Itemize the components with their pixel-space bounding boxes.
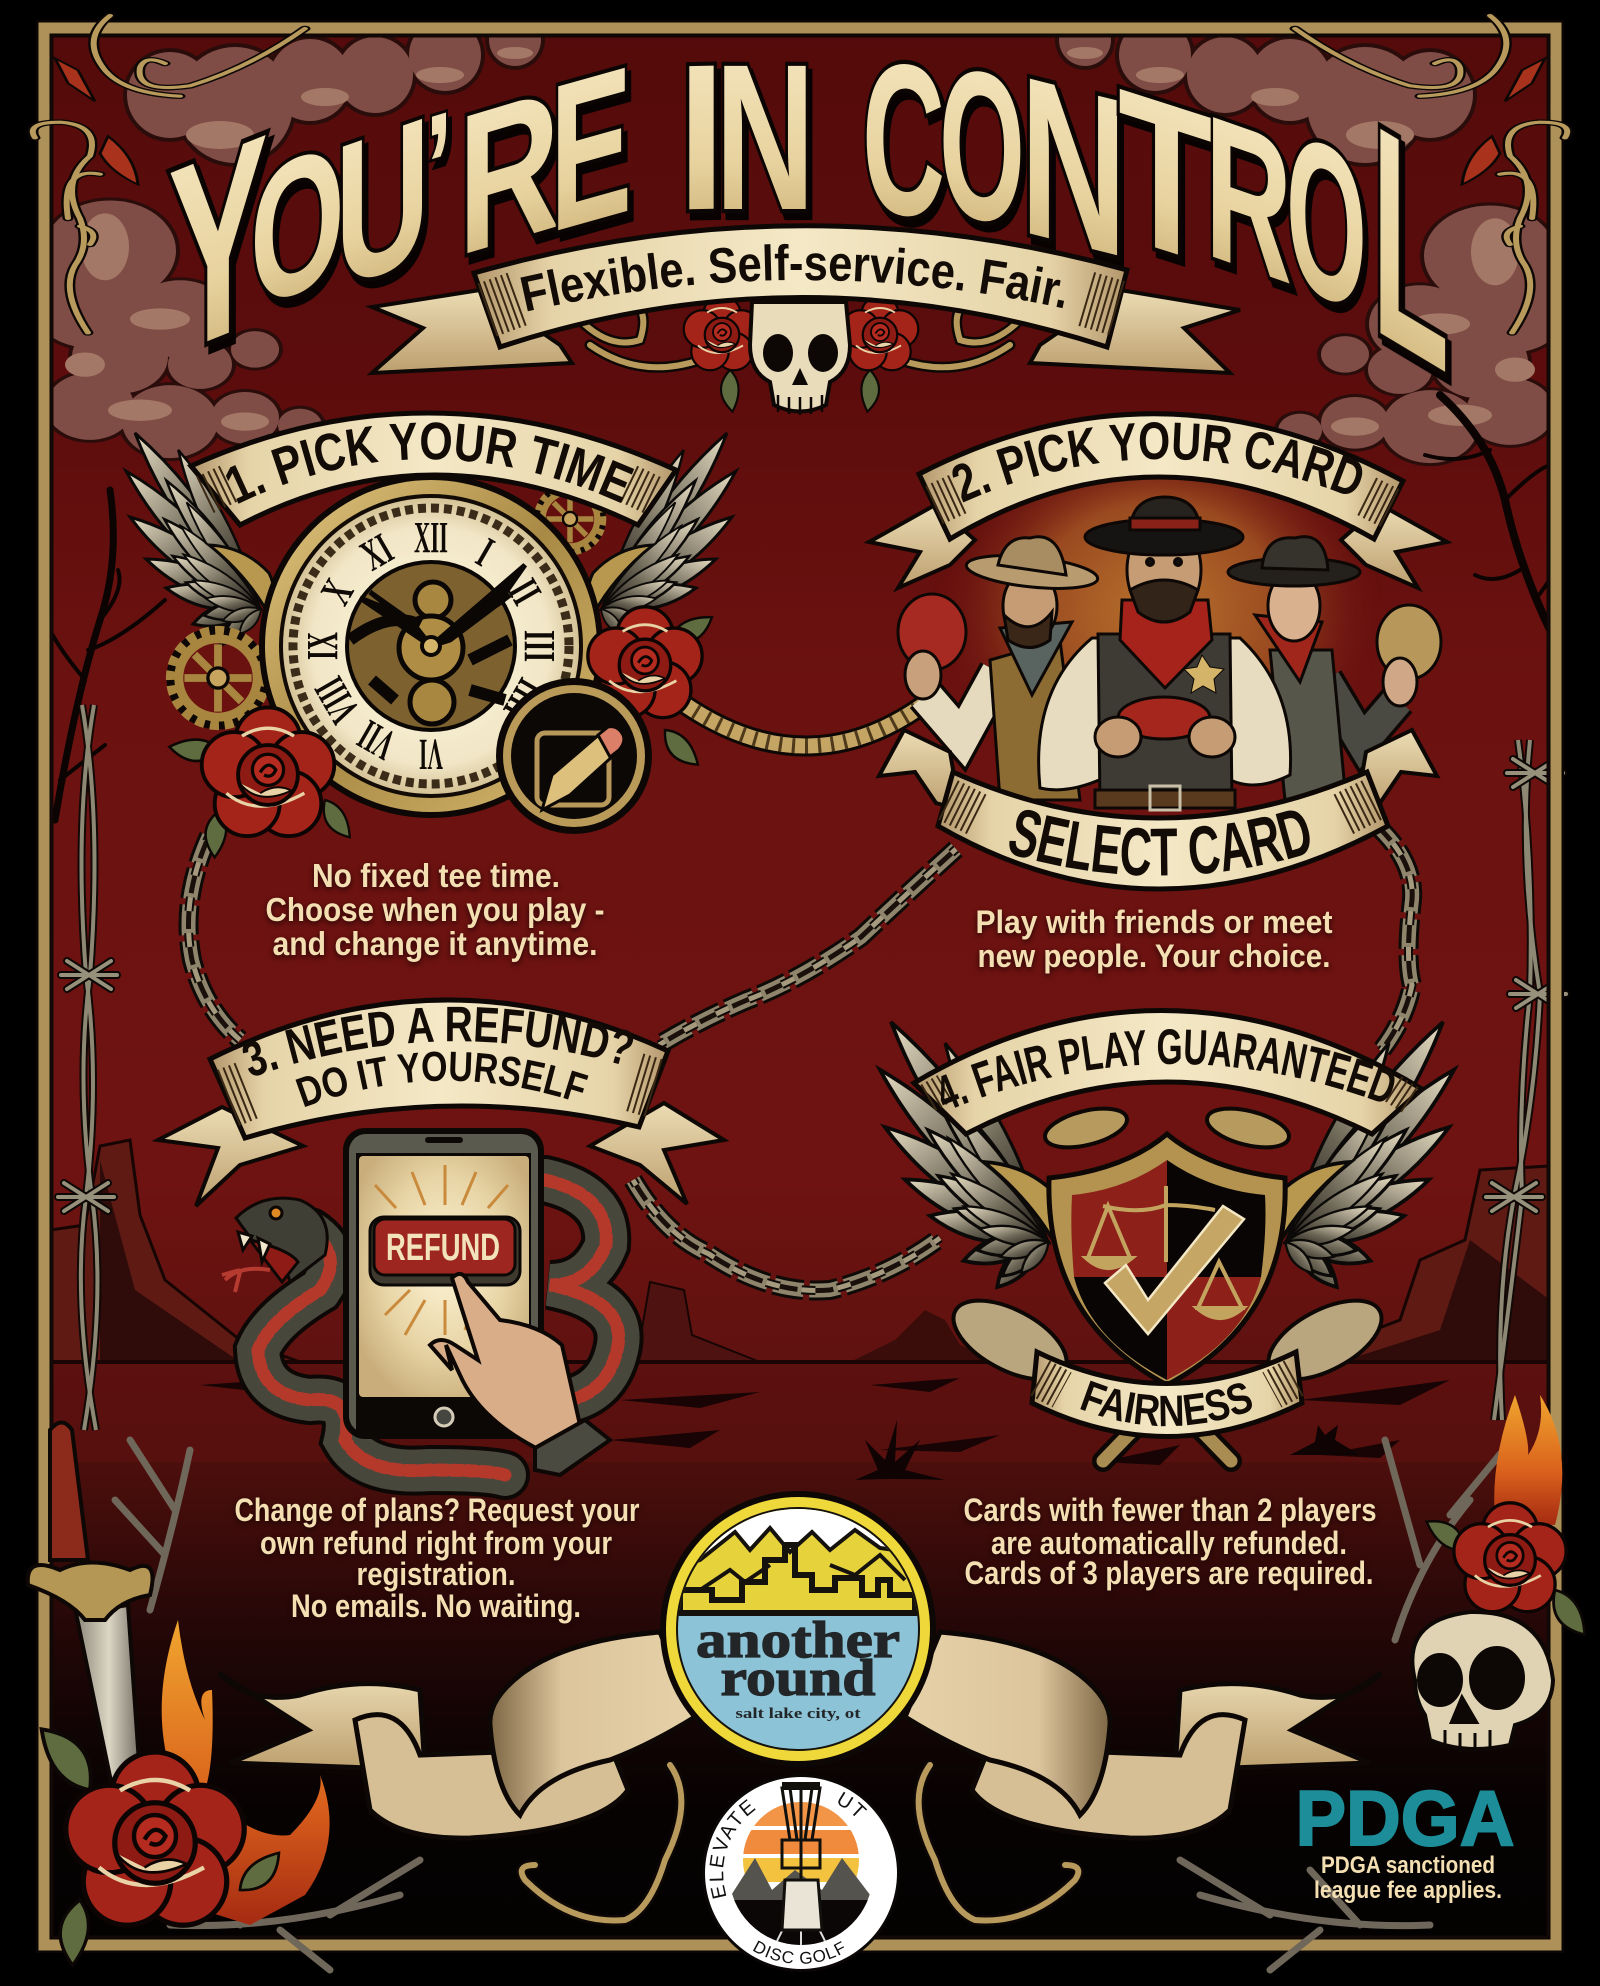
title: I bbox=[678, 21, 725, 254]
banner: 2. pick your card bbox=[864, 411, 1452, 592]
step 4 text: are automatically refunded. bbox=[991, 1525, 1347, 1561]
step 1: clock illustration bbox=[122, 410, 740, 860]
step 4: fairness illustration bbox=[875, 1008, 1459, 1472]
step 1 text: No fixed tee time. bbox=[312, 857, 560, 894]
title: C bbox=[862, 18, 945, 262]
icon: rose right bbox=[588, 607, 717, 774]
icon: pointing hand bbox=[430, 1274, 610, 1475]
icon: pocket watch: IIII bbox=[494, 671, 556, 730]
icon: wings fairness bbox=[880, 1022, 1454, 1287]
pdga logo and note: PDGA bbox=[1296, 1774, 1514, 1862]
title bbox=[168, 18, 1449, 438]
banner: select card: SELECT CARD bbox=[1009, 810, 1310, 876]
flames right bbox=[1494, 1395, 1562, 1525]
icon: check mark bbox=[1105, 1206, 1244, 1334]
banner: 3. need a refund: DO IT YOURSELF bbox=[296, 1052, 588, 1107]
banner: 3. need a refund bbox=[152, 997, 730, 1246]
title: L bbox=[1372, 59, 1449, 438]
title: N bbox=[1020, 27, 1127, 306]
blank ribbon left bbox=[219, 1632, 695, 1838]
icon: scales bbox=[1086, 1186, 1243, 1318]
step 2 text: Play with friends or meet bbox=[976, 904, 1333, 940]
skull right bbox=[1412, 1612, 1553, 1752]
step 2 text bbox=[976, 904, 1333, 974]
cowboy right bbox=[1228, 537, 1441, 800]
step 1 text: Choose when you play - bbox=[266, 891, 604, 928]
refund button: REFUND bbox=[386, 1227, 500, 1269]
icon: crossed sticks bbox=[1103, 1428, 1231, 1461]
dead trees bbox=[50, 395, 1558, 820]
step 2: cowboys illustration bbox=[864, 411, 1452, 892]
step 3 text: Change of plans? Request your bbox=[234, 1492, 640, 1528]
step 3 text: own refund right from your bbox=[260, 1525, 612, 1561]
storm clouds bbox=[28, 10, 1572, 466]
title: U bbox=[335, 72, 430, 332]
title: R bbox=[1205, 71, 1292, 327]
subtitle banner bbox=[364, 223, 1241, 376]
step 4 text bbox=[964, 1492, 1376, 1591]
banner: select card bbox=[876, 728, 1440, 892]
icon: floating discs bbox=[1041, 1101, 1293, 1155]
desert landscape bbox=[42, 1140, 1558, 1480]
dagger bbox=[28, 1422, 152, 1815]
rose right bbox=[1424, 1503, 1588, 1642]
title: ’ bbox=[425, 79, 453, 255]
banner: 4. fair play guaranteed: 4. FAIR PLAY GUARANTEED bbox=[940, 1029, 1395, 1108]
icon: pocket watch: IX bbox=[298, 632, 347, 660]
icon: pocket watch: XI bbox=[352, 524, 401, 580]
icon: pocket watch: VI bbox=[419, 730, 443, 779]
logo: another round: round bbox=[720, 1650, 876, 1707]
pdga logo and note bbox=[1296, 1774, 1514, 1904]
banner: 2. pick your card: 2. PICK YOUR CARD bbox=[952, 422, 1362, 502]
barbed wire bbox=[58, 705, 1566, 1430]
title: Y bbox=[168, 76, 268, 414]
icon: pocket watch: II bbox=[499, 571, 551, 613]
icon: pocket watch: XII bbox=[414, 513, 448, 562]
step 1 text bbox=[266, 857, 604, 962]
logo: elevate ut disc golf: UT bbox=[838, 1792, 868, 1816]
icon: rose left bbox=[169, 707, 352, 858]
rose large bbox=[37, 1717, 289, 1967]
banner: fairness bbox=[1029, 1348, 1305, 1439]
title: T bbox=[1118, 41, 1215, 312]
icon: pocket watch: VIII bbox=[305, 669, 369, 732]
icon: pocket watch: VII bbox=[350, 710, 404, 770]
icon: edit badge bbox=[496, 678, 652, 834]
icon: shield bbox=[1049, 1134, 1285, 1385]
flames left bbox=[155, 1620, 330, 1925]
title: R bbox=[458, 47, 560, 299]
step 3 text: registration. bbox=[356, 1556, 516, 1592]
blank ribbon right bbox=[905, 1632, 1381, 1838]
icon: side discs bbox=[941, 1284, 1394, 1396]
logo: elevate ut disc golf: DISC GOLF bbox=[753, 1940, 844, 1964]
title: O bbox=[1286, 81, 1367, 362]
icon: pocket watch: III bbox=[515, 630, 564, 662]
cowboy center bbox=[1039, 497, 1291, 810]
step 4 text: Cards with fewer than 2 players bbox=[964, 1492, 1376, 1528]
subtitle banner: Flexible. Self-service. Fair. bbox=[520, 244, 1064, 312]
icon: phone bbox=[343, 1128, 544, 1439]
refund button bbox=[370, 1217, 520, 1285]
chains bbox=[188, 823, 1412, 1291]
title: O bbox=[250, 99, 345, 352]
step 1 text: and change it anytime. bbox=[272, 925, 598, 962]
banner: 3. need a refund: 3. NEED A REFUND? bbox=[242, 1006, 634, 1076]
pdga logo and note: league fee applies. bbox=[1314, 1877, 1502, 1904]
icon: pocket watch: I bbox=[469, 528, 502, 576]
logo: elevate ut disc golf: ELEVATE bbox=[710, 1799, 756, 1899]
step 2 text: new people. Your choice. bbox=[978, 938, 1330, 974]
logo: another round: salt lake city, ot bbox=[736, 1706, 861, 1722]
dagger and rose bbox=[28, 1422, 330, 1967]
logo: another round: another bbox=[696, 1612, 900, 1669]
icon: wings bbox=[126, 433, 736, 645]
icon: pocket watch: X bbox=[311, 571, 363, 613]
logo: elevate ut disc golf bbox=[705, 1777, 897, 1972]
step 3 text bbox=[234, 1492, 640, 1624]
thorn branches bbox=[115, 1430, 1520, 1970]
skull and roses ornament bbox=[580, 296, 1020, 415]
step 3 text: No emails. No waiting. bbox=[291, 1588, 581, 1624]
banner: fairness: FAIRNESS bbox=[1080, 1380, 1252, 1426]
title: E bbox=[550, 20, 632, 277]
banner: 1. pick your time: 1. PICK YOUR TIME bbox=[226, 422, 634, 504]
icon: pocket watch bbox=[259, 474, 603, 818]
step 4 text: Cards of 3 players are required. bbox=[964, 1555, 1374, 1591]
logo: another round bbox=[660, 1491, 936, 1767]
pdga logo and note: PDGA sanctioned bbox=[1321, 1852, 1495, 1879]
icon: snake bbox=[258, 1180, 619, 1475]
cowboy left bbox=[898, 537, 1099, 800]
title: O bbox=[939, 21, 1025, 270]
title: N bbox=[715, 22, 815, 254]
bottom scrollwork bbox=[522, 1765, 1078, 1920]
rope connecting step 1 and 2 bbox=[684, 700, 930, 746]
step 3: refund illustration bbox=[152, 997, 730, 1500]
